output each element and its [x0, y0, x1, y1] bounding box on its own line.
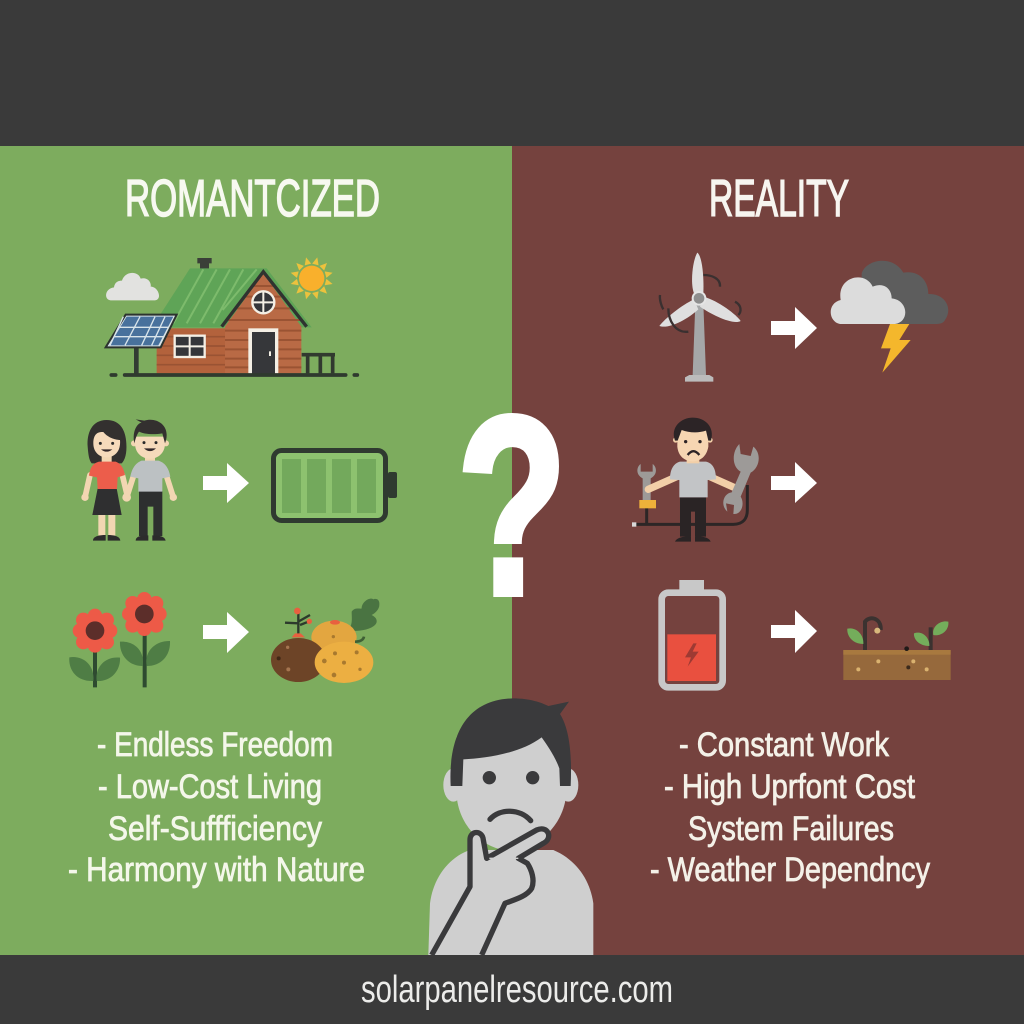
- footer bar: [0, 955, 1024, 1024]
- dark cloud: [862, 261, 948, 324]
- text block: reality drawbacks: [650, 726, 930, 889]
- roof: [160, 268, 312, 327]
- icon: happy couple: [81, 419, 177, 541]
- legs: [680, 497, 706, 537]
- arrow: [771, 462, 817, 503]
- text block: romanticized benefits: [68, 726, 365, 889]
- text block: romanticized benefits: - Harmony with Nature: [68, 851, 365, 889]
- text block: reality drawbacks: - Constant Work: [679, 726, 890, 764]
- panel: romanticized background: [0, 146, 512, 955]
- top bar: [0, 0, 1024, 146]
- door: [248, 328, 278, 374]
- arrow: [771, 610, 817, 653]
- heading: romanticized: ROMANTCIZED: [125, 170, 380, 228]
- hair: [450, 698, 571, 786]
- text block: romanticized benefits: - Low-Cost Living: [98, 768, 322, 806]
- text block: romanticized benefits: - Endless Freedom: [97, 726, 333, 764]
- arrow: [203, 612, 249, 653]
- cable: [634, 485, 747, 524]
- icon: thinking person: [428, 698, 593, 955]
- question mark: ?: [457, 363, 567, 648]
- footer url: solarpanelresource.com: [361, 969, 673, 1011]
- heading: reality: REALITY: [709, 170, 849, 228]
- icon: log cabin with solar panel: [106, 257, 357, 375]
- left wrench: [637, 464, 656, 500]
- text block: reality drawbacks: - Weather Dependncy: [650, 851, 930, 889]
- arms: [648, 477, 738, 489]
- gable wall: [225, 273, 301, 373]
- lightning: [881, 324, 911, 373]
- solar panel: [106, 315, 177, 374]
- shirt: [670, 462, 716, 497]
- arrow: [771, 307, 817, 349]
- chimney: [197, 258, 212, 285]
- light cloud: [831, 277, 905, 324]
- icon: storm clouds and lightning: [831, 261, 948, 373]
- icon: full battery: [274, 450, 397, 520]
- text block: romanticized benefits: Self-Suffficiency: [108, 810, 322, 848]
- arrow: [203, 463, 249, 503]
- fence: [302, 355, 335, 373]
- ears: [443, 768, 463, 802]
- gable outline: [222, 272, 307, 327]
- panel: reality background: [512, 146, 1024, 955]
- icon: broken wind turbine: [659, 253, 741, 382]
- eyes and mouth: [483, 771, 496, 784]
- window: [175, 336, 205, 357]
- face: [457, 737, 566, 851]
- text block: reality drawbacks: - High Uprfont Cost: [664, 768, 915, 806]
- hand: [432, 829, 549, 955]
- icon: sun: [290, 257, 333, 300]
- right wrench: [723, 444, 759, 514]
- man: [122, 419, 177, 541]
- head: [687, 453, 699, 463]
- icon: low battery: [662, 580, 723, 687]
- text block: reality drawbacks: System Failures: [688, 810, 894, 848]
- icon: failing seedlings in soil: [843, 618, 951, 680]
- icon: frustrated man with wrenches: [632, 418, 759, 542]
- ground line: [111, 369, 357, 380]
- wing wall: [157, 328, 226, 373]
- icon: small cloud: [106, 273, 159, 300]
- woman: [81, 420, 128, 541]
- round window: [252, 291, 274, 313]
- icon: harvest vegetables: [271, 599, 379, 683]
- icon: red flowers: [69, 592, 170, 687]
- body: [428, 850, 593, 955]
